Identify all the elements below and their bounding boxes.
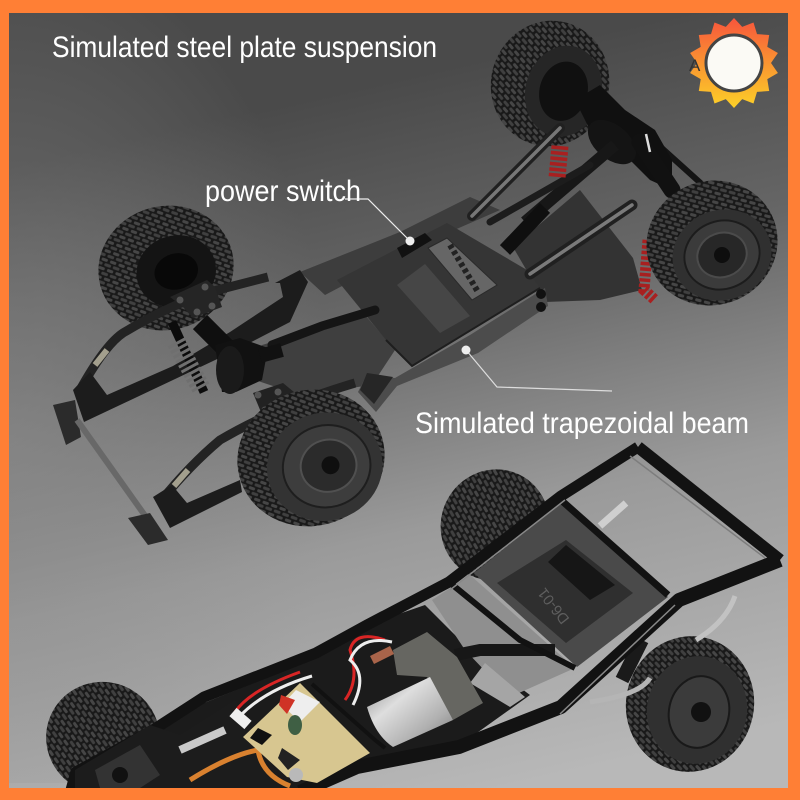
upper chassis: side plate right xyxy=(153,480,242,528)
upper chassis: front differential and axle xyxy=(200,322,282,394)
upper chassis: front leaf springs xyxy=(80,277,355,502)
upper chassis: rear axle assembly xyxy=(505,85,705,250)
lower chassis: far wheel xyxy=(422,451,568,599)
lower chassis: bottom left wheel xyxy=(30,666,176,800)
upper chassis: underbody shadow xyxy=(240,315,395,395)
upper chassis: front cross bar and end plates xyxy=(53,400,168,545)
lower chassis: red and white wires xyxy=(233,637,392,748)
lower chassis: metal leaf springs xyxy=(590,503,735,702)
power switch slot xyxy=(397,233,432,258)
upper chassis: side plate left xyxy=(73,270,308,422)
upper chassis: left front wheel xyxy=(84,191,248,345)
upper chassis: battery cover with CE label xyxy=(337,223,540,366)
lower chassis: prop shaft xyxy=(455,650,555,655)
badge text fragment: A xyxy=(689,56,701,75)
lower chassis: servo wire xyxy=(190,750,290,786)
lower chassis: bottom right wheel xyxy=(613,624,767,784)
upper chassis: far rear wheel xyxy=(477,7,623,160)
lower chassis: gearbox xyxy=(393,632,483,720)
lower chassis: black frame rails xyxy=(71,447,780,792)
upper chassis: front coil shock xyxy=(172,322,204,392)
upper chassis: right rear wheel xyxy=(629,162,795,324)
lower chassis: rear end plate xyxy=(75,700,285,788)
tray label: D6-01 xyxy=(535,584,573,627)
upper chassis: near front wheel xyxy=(222,373,400,543)
upper chassis: rear suspension links xyxy=(472,128,632,274)
upper chassis: front drive shaft xyxy=(272,310,375,345)
upper chassis: rail hook xyxy=(360,373,393,404)
lower chassis: motor xyxy=(367,677,453,747)
leader line: power switch xyxy=(345,199,414,246)
upper chassis: axle clamp plates xyxy=(170,280,300,417)
lower chassis: light window panels xyxy=(432,575,575,707)
upper chassis: lower trapezoidal beam rail xyxy=(358,288,548,412)
icon: sun badge xyxy=(689,18,778,108)
lower chassis: battery tray xyxy=(474,503,668,667)
upper chassis: red coil spring rear xyxy=(557,146,560,178)
upper chassis: under tank xyxy=(513,190,642,302)
label: power switch: power switch xyxy=(205,175,361,208)
upper chassis: upper beam rail xyxy=(300,197,500,295)
leader line: trapezoidal beam xyxy=(462,346,612,391)
lower chassis: circuit board xyxy=(243,683,370,783)
label: steel plate suspension: Simulated steel plate suspension xyxy=(52,31,437,64)
lower chassis: floor behind electronics xyxy=(72,605,530,788)
upper chassis: beam holes xyxy=(536,289,546,312)
label: trapezoidal beam: Simulated trapezoidal beam xyxy=(415,407,749,440)
